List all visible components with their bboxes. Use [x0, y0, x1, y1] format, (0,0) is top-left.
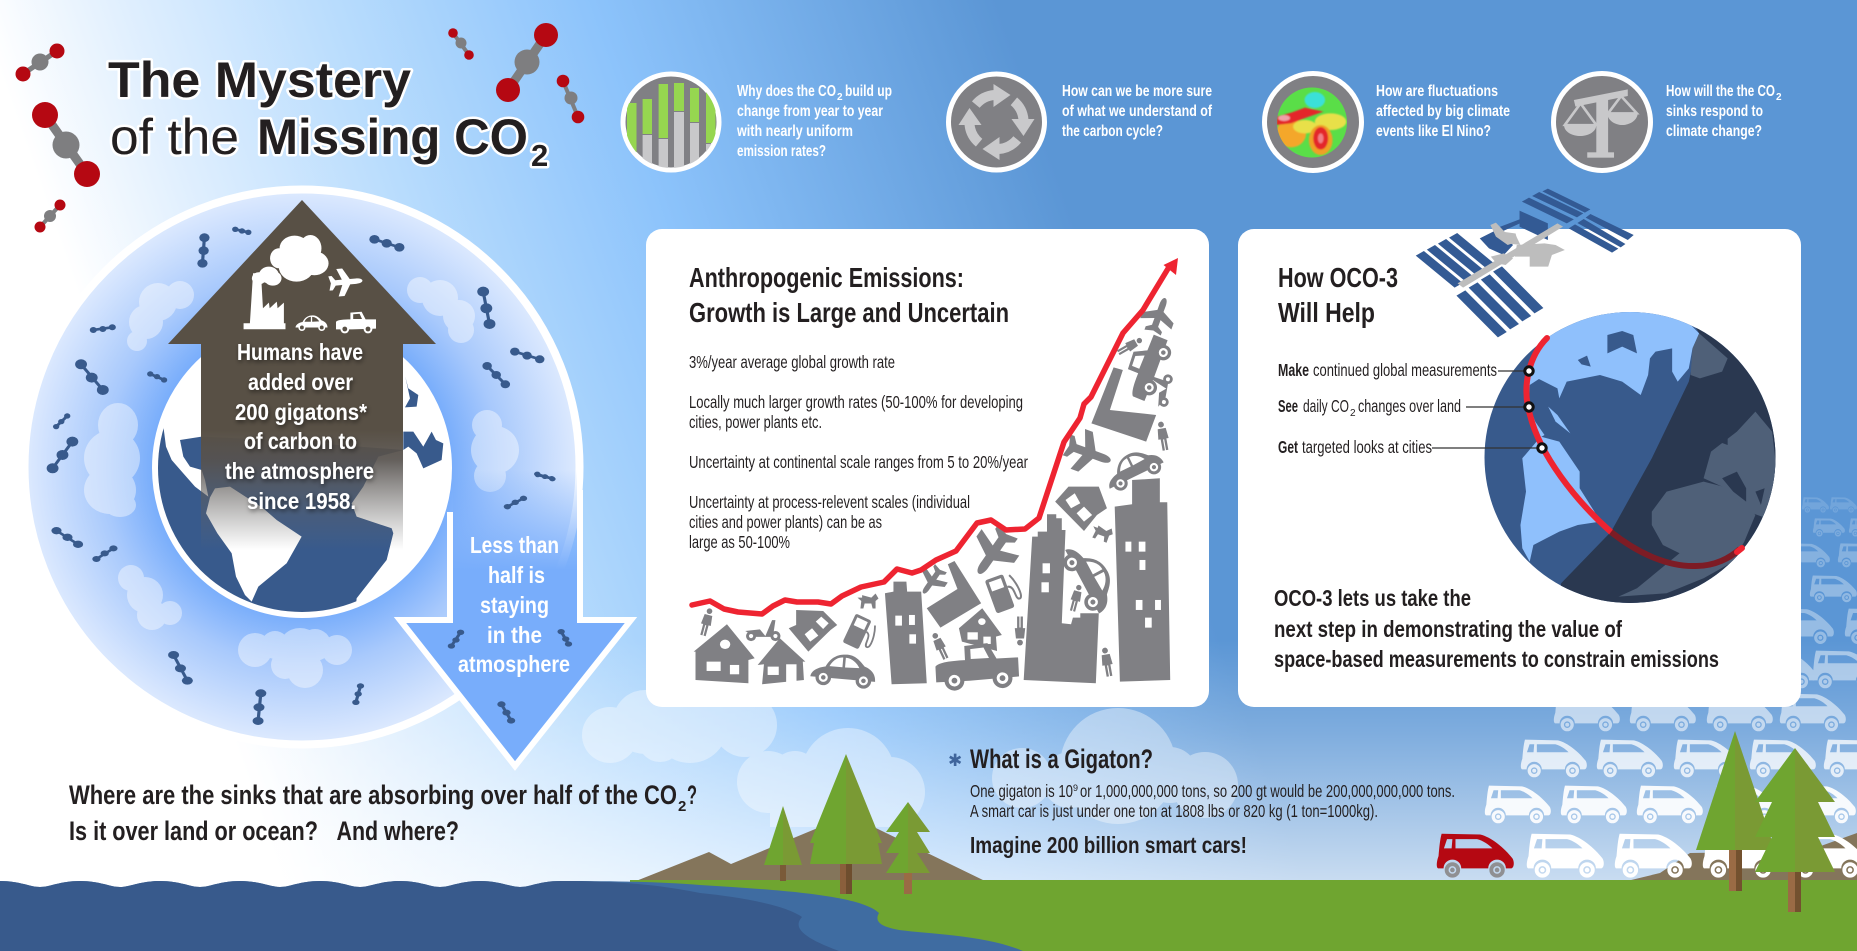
text block: emission facts: 3%/year average global growth rate — [689, 352, 895, 372]
text block: emission facts: Uncertainty at process-relevent scales (individual — [689, 492, 970, 512]
text: humans added carbon — [225, 339, 374, 514]
callout: measurement labels: 2 — [1350, 408, 1356, 419]
panel: how OCO-3 will help — [1238, 229, 1822, 707]
callout: measurement labels: targeted looks at cities — [1302, 437, 1432, 457]
heading: How OCO-3 — [1278, 262, 1398, 293]
icon: asterisk: ✱ — [948, 751, 962, 771]
background clouds — [582, 687, 1238, 827]
text: question 3: events like El Nino? — [1376, 123, 1491, 140]
brown up arrow — [168, 200, 436, 550]
mountains — [636, 815, 1857, 881]
text: question 2: How can we be more sure — [1062, 83, 1212, 100]
earth globe with white land — [152, 357, 452, 618]
text: question 4: How will the the CO — [1666, 83, 1775, 100]
atmosphere ring — [24, 190, 580, 744]
panel: anthropogenic emissions — [646, 229, 1209, 707]
callout: measurement labels: continued global measurements — [1313, 360, 1497, 380]
callout: what is a gigaton: One gigaton is 10 — [970, 781, 1073, 801]
heading: Will Help — [1278, 297, 1375, 328]
red smart car — [1437, 834, 1514, 876]
text: where are the sinks: 2 — [678, 798, 686, 815]
text: question 1: with nearly uniform — [736, 123, 853, 140]
text: question 3 — [1376, 83, 1510, 140]
text: where are the sinks: Is it over land or ocean? — [69, 816, 318, 846]
gray city icons — [694, 292, 1181, 692]
red growth line with arrow — [692, 258, 1178, 614]
text block: next step: space-based measurements to constrain emissions — [1274, 646, 1719, 672]
trees on the right — [1696, 731, 1835, 912]
text: less than half staying: Less than — [470, 532, 559, 558]
text: question 3: How are fluctuations — [1376, 83, 1498, 100]
callout: what is a gigaton: or 1,000,000,000 tons, so 200 gt would be 200,000,000,000 tons. — [1080, 781, 1455, 801]
icon: cycle arrows circle — [948, 74, 1044, 170]
icon: factory, plane, car and truck — [244, 235, 376, 333]
text block: next step: OCO-3 lets us take the — [1274, 585, 1471, 611]
text: question 1: emission rates? — [737, 143, 826, 160]
text block: next step: next step in demonstrating the value of — [1274, 616, 1622, 642]
red and gray CO2 molecules — [16, 23, 584, 232]
smart cars, front row — [1527, 834, 1857, 876]
fleet of smart cars, far rows — [1485, 497, 1857, 822]
clouds in atmosphere ring — [84, 277, 519, 688]
text block: emission facts: cities, power plants etc. — [689, 412, 822, 432]
text: where are the sinks: ? — [687, 780, 697, 810]
globe with orbit — [1484, 312, 1776, 603]
title: of the — [110, 109, 239, 165]
text: question 1: Why does the CO — [737, 83, 836, 100]
icon: balance scale circle — [1554, 74, 1650, 170]
small molecules in arrow — [448, 472, 572, 724]
callout: measurement labels: daily CO — [1303, 396, 1349, 416]
text: humans added carbon: Humans have — [237, 339, 363, 365]
text block: emission facts: cities and power plants) can be as — [689, 512, 882, 532]
heading: Growth is Large and Uncertain — [689, 297, 1009, 328]
text: question 2: the carbon cycle? — [1062, 123, 1163, 140]
title — [108, 52, 548, 173]
text: question 1: change from year to year — [737, 103, 883, 120]
text: question 2 — [1062, 83, 1213, 140]
heading — [689, 262, 1009, 328]
text block: next step — [1274, 585, 1719, 672]
icon: bar chart circle — [623, 74, 719, 189]
text: question 1: build up — [845, 83, 892, 100]
text block: emission facts: large as 50-100% — [689, 532, 790, 552]
callout: what is a gigaton — [948, 744, 1455, 858]
text: humans added carbon: added over — [248, 369, 353, 395]
text: humans added carbon: the atmosphere — [225, 458, 374, 484]
icon: space station — [1416, 189, 1634, 337]
text: question 1: 2 — [837, 92, 843, 103]
callout: what is a gigaton: A smart car is just under one ton at 1808 lbs or 820 kg (1 ton=1000kg). — [970, 801, 1378, 821]
text: humans added carbon: 200 gigatons* — [235, 399, 368, 425]
text: less than half staying: atmosphere — [458, 651, 570, 677]
text: question 1 — [736, 83, 892, 160]
icon: climate anomaly map circle — [1264, 74, 1362, 170]
small blue carbon molecules in ring — [47, 227, 554, 725]
callout: what is a gigaton: Imagine 200 billion smart cars! — [970, 832, 1247, 858]
text: question 4: climate change? — [1666, 123, 1762, 140]
text: question 2: of what we understand of — [1062, 103, 1213, 120]
callout: measurement labels: changes over land — [1358, 396, 1461, 416]
callout: measurement labels: Get — [1278, 437, 1298, 457]
text: humans added carbon: since 1958. — [247, 488, 356, 514]
text: humans added carbon: of carbon to — [244, 428, 357, 454]
text: less than half staying: staying — [480, 592, 549, 618]
title: Missing CO — [257, 109, 528, 165]
callout: measurement labels: Make — [1278, 360, 1309, 380]
text: where are the sinks: Where are the sinks that are absorbing over half of the CO — [69, 780, 677, 810]
callout: what is a gigaton: 9 — [1073, 783, 1078, 793]
ground and water — [0, 880, 1857, 951]
text block: emission facts: Locally much larger growth rates (50-100% for developing — [689, 392, 1023, 412]
text: question 4 — [1666, 83, 1782, 140]
title: The Mystery — [108, 52, 411, 108]
text: question 4: sinks respond to — [1666, 103, 1763, 120]
text block: emission facts: Uncertainty at continental scale ranges from 5 to 20%/year — [689, 452, 1028, 472]
text: where are the sinks: And where? — [336, 816, 459, 846]
title: 2 — [531, 138, 548, 173]
callout: what is a gigaton: What is a Gigaton? — [970, 744, 1153, 774]
callout: measurement labels: See — [1278, 396, 1298, 416]
night side — [1560, 328, 1776, 603]
trees near river — [764, 754, 930, 894]
heading: Anthropogenic Emissions: — [689, 262, 964, 293]
text block: emission facts — [689, 352, 1028, 552]
callout: measurement labels — [1278, 360, 1546, 457]
text: less than half staying: in the — [487, 622, 542, 648]
day land — [1524, 305, 1699, 438]
text: question 4: 2 — [1776, 92, 1782, 103]
text: question 3: affected by big climate — [1376, 103, 1510, 120]
text: where are the sinks — [69, 780, 697, 846]
text: less than half staying: half is — [488, 562, 545, 588]
blue down arrow — [399, 468, 632, 766]
heading — [1278, 262, 1398, 328]
text: less than half staying — [458, 532, 570, 677]
